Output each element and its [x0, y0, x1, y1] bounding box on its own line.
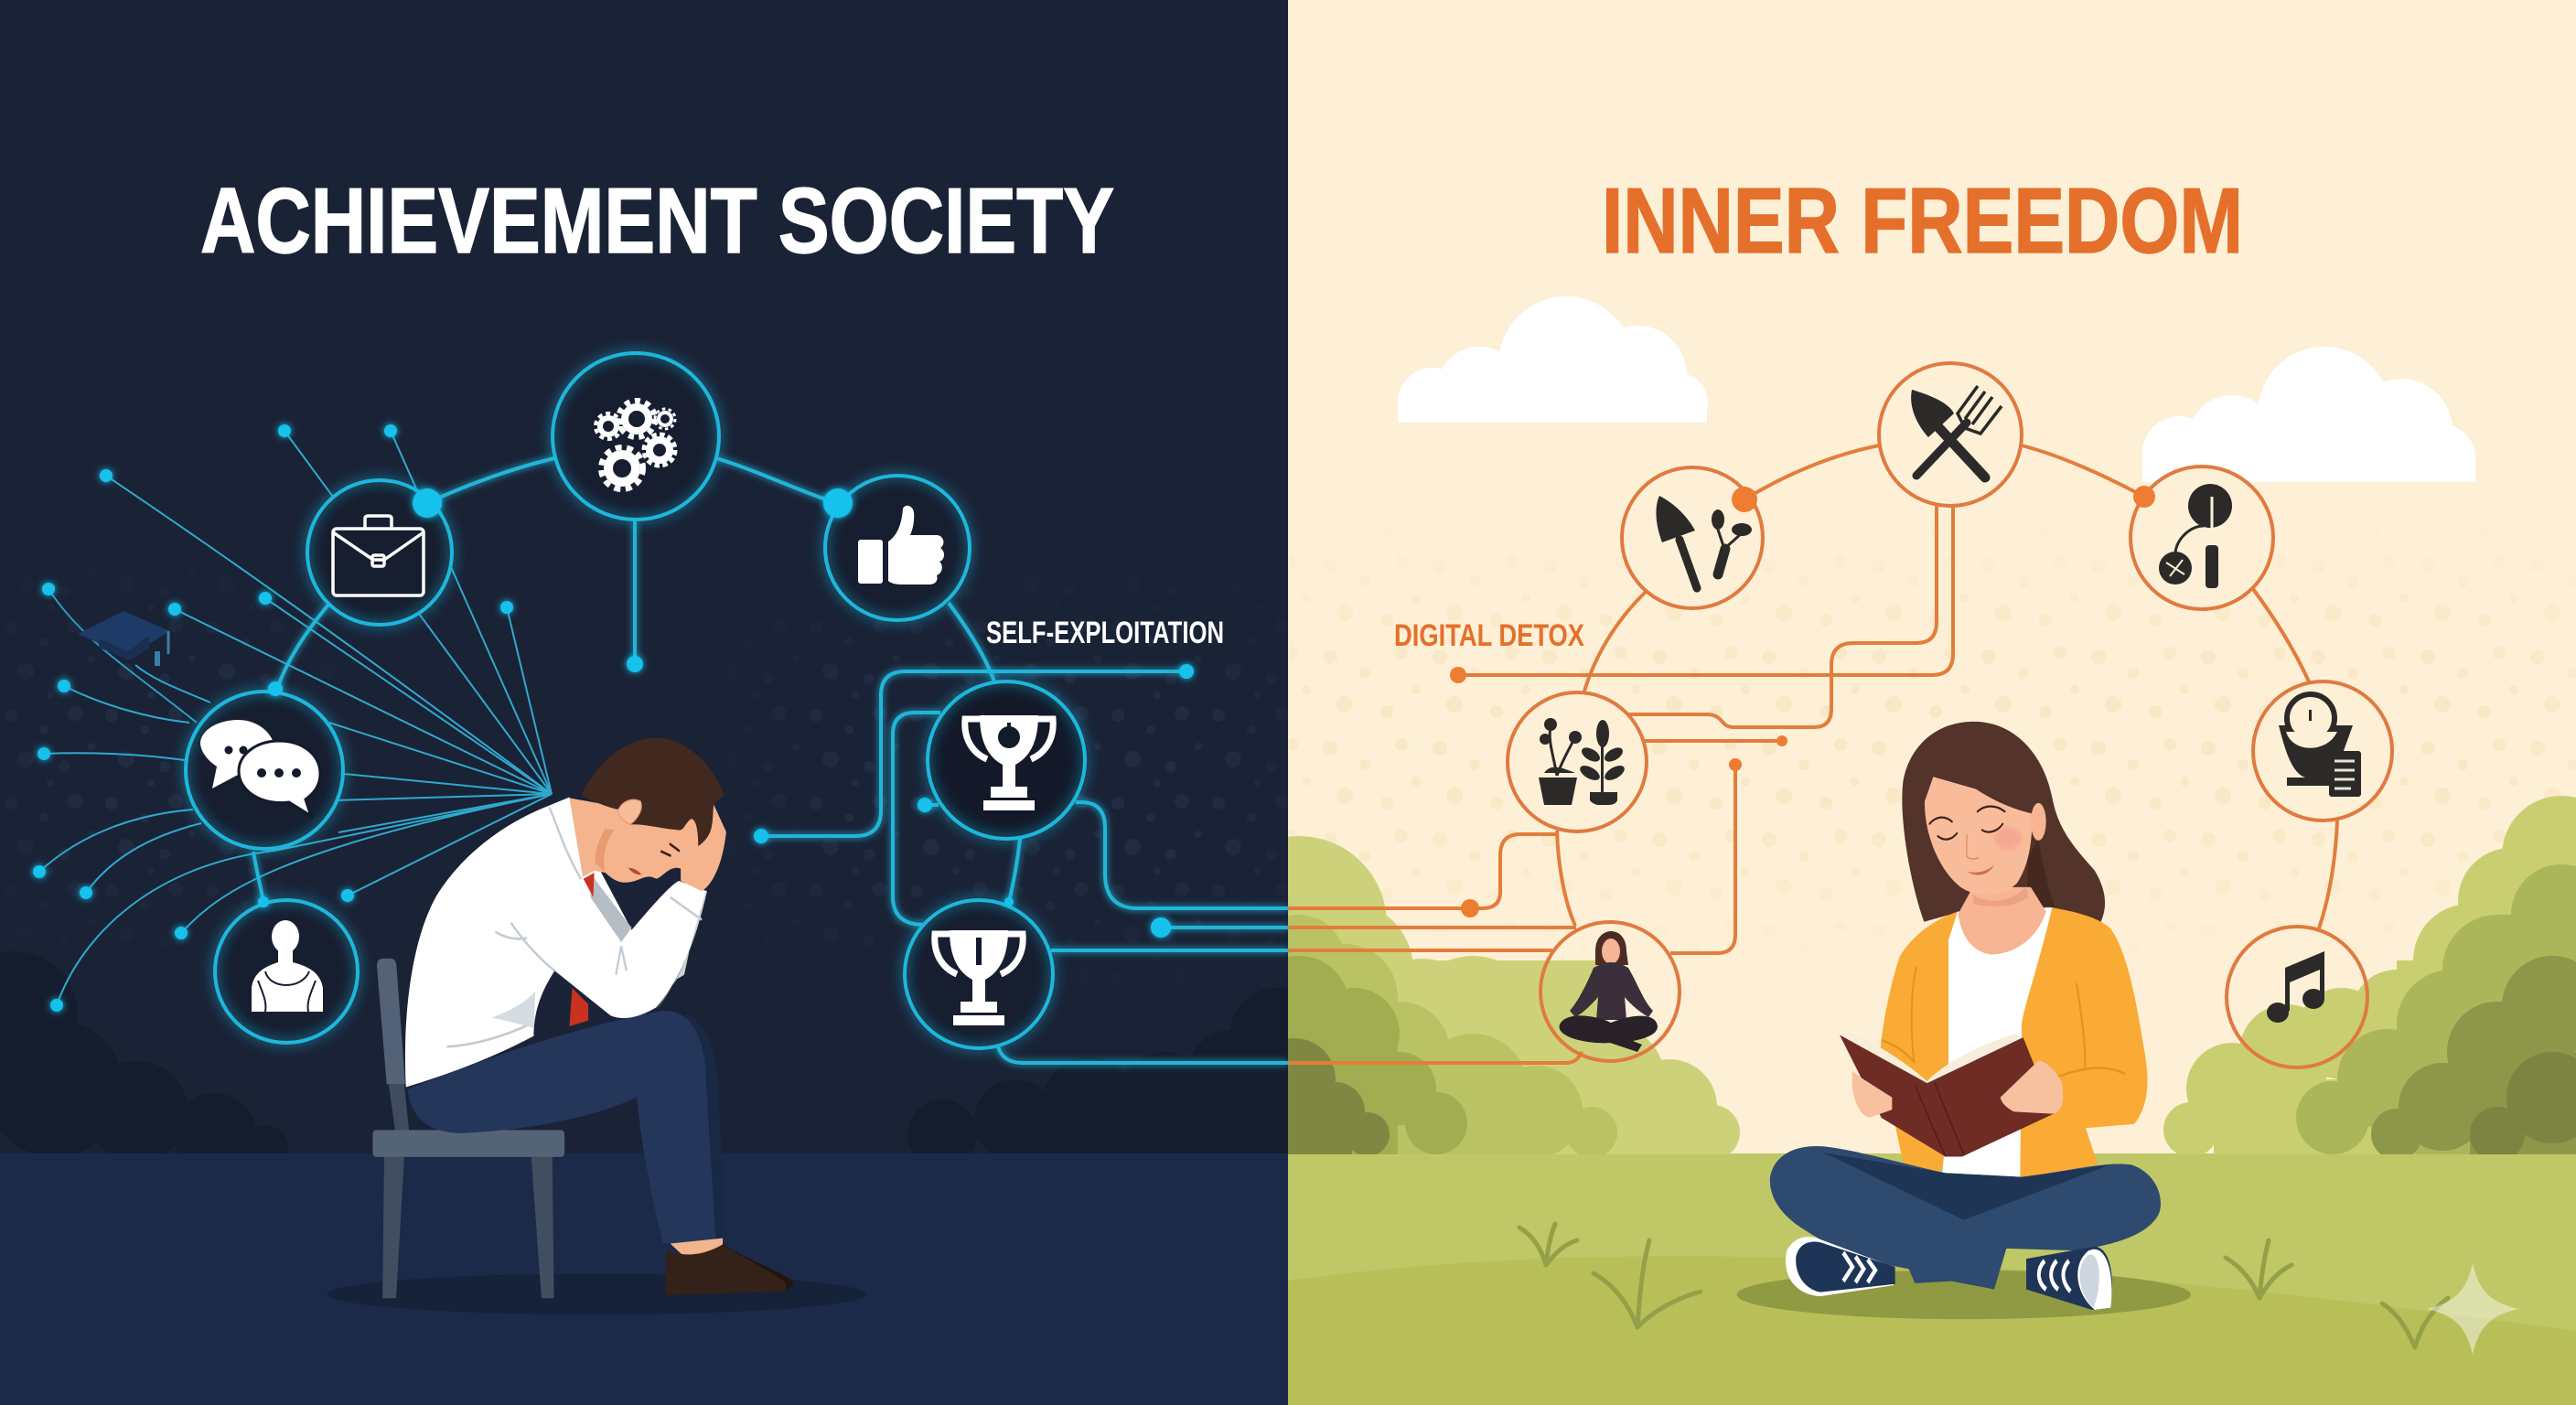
- icon: person bust: [252, 920, 323, 1012]
- face: [1925, 777, 2033, 895]
- ray end dots: [33, 424, 513, 1012]
- icon: graduation cap: [78, 611, 170, 666]
- figure: stressed man on chair: [327, 738, 866, 1314]
- node: tree and tools: [2131, 467, 2273, 609]
- connectors: freedom network: [1288, 445, 2337, 1063]
- connector dots: [258, 488, 1194, 938]
- node: briefcase: [307, 480, 452, 625]
- hair: [581, 738, 724, 846]
- node: bust: [215, 900, 358, 1043]
- node: scale and phone: [2253, 681, 2392, 820]
- node: chat: [186, 692, 343, 849]
- trousers: [1770, 1146, 2161, 1290]
- shoe: [665, 1239, 793, 1295]
- back hair: [1902, 722, 2105, 922]
- cardigan: [1880, 907, 2147, 1185]
- connector dots: [1450, 486, 2155, 917]
- ear: [617, 799, 641, 824]
- label: digital detox: DIGITAL DETOX: [1394, 618, 1584, 653]
- cardigan folds: [1882, 967, 2125, 1077]
- connectors: achievement network: [253, 458, 1288, 1063]
- icon: chat bubbles: [200, 720, 320, 816]
- panel: inner freedom background: [1288, 0, 2576, 1405]
- node: music: [2227, 927, 2367, 1067]
- node: meditation: [1540, 922, 1680, 1061]
- grass tufts: [1519, 1224, 2448, 1347]
- sneaker right: [2026, 1247, 2112, 1310]
- trousers: [408, 1011, 715, 1243]
- icon: meditating woman: [1560, 931, 1658, 1052]
- node: thumbs up: [825, 476, 970, 620]
- icon: thumbs up: [858, 506, 944, 585]
- node: trophy two: [905, 900, 1053, 1048]
- node: crossed tools: [1879, 363, 2022, 506]
- node: potted plants: [1508, 692, 1647, 831]
- icon: sparkle watermark: [2427, 1263, 2518, 1355]
- title: achievement society: ACHIEVEMENT SOCIETY: [200, 170, 1114, 273]
- node: trophy one: [928, 681, 1085, 839]
- icon: scale with phone: [2279, 694, 2361, 797]
- face lines: [1929, 807, 2005, 840]
- shadow: [1736, 1271, 2191, 1319]
- shirt: [405, 798, 707, 1087]
- neck: [1959, 887, 2046, 954]
- shirt folds: [447, 808, 702, 1046]
- sneaker left: [1786, 1237, 1895, 1296]
- icon: gears cluster: [596, 401, 675, 489]
- icon: shovel and fork: [1911, 386, 2002, 477]
- icon: trophy: [965, 715, 1053, 810]
- icon: trowel and sprout: [1656, 496, 1752, 588]
- shadow: [327, 1274, 866, 1314]
- bushes: right group: [2163, 796, 2576, 1162]
- node: gears: [553, 353, 719, 520]
- book: [1840, 1032, 2054, 1156]
- bushes: left group: [1288, 836, 1740, 1154]
- icon: potted plants: [1539, 718, 1626, 805]
- icon: trophy: [935, 930, 1023, 1025]
- label: self-exploitation: SELF-EXPLOITATION: [986, 616, 1224, 650]
- icon: cloud left: [1398, 296, 1708, 423]
- head and hand: [569, 798, 726, 891]
- chair: [372, 959, 564, 1298]
- node: trowel and sprout: [1622, 467, 1763, 608]
- hands: [1852, 1071, 1892, 1118]
- gap between chest and arm: [595, 854, 681, 930]
- chart: neural rays from man's back: [39, 431, 552, 1005]
- icon: cloud right: [2142, 347, 2475, 490]
- dark gap under arm with tie: [532, 971, 614, 1036]
- figure: woman reading: [1736, 722, 2191, 1319]
- icon: briefcase: [333, 516, 424, 595]
- panel: achievement society background: [0, 627, 1288, 1405]
- face details: [661, 844, 679, 855]
- back leg: [684, 1014, 726, 1239]
- icon: sapling: [2159, 484, 2232, 588]
- t-shirt: [1942, 907, 2052, 1177]
- title: inner freedom: INNER FREEDOM: [1602, 170, 2243, 273]
- icon: music notes: [2267, 951, 2324, 1023]
